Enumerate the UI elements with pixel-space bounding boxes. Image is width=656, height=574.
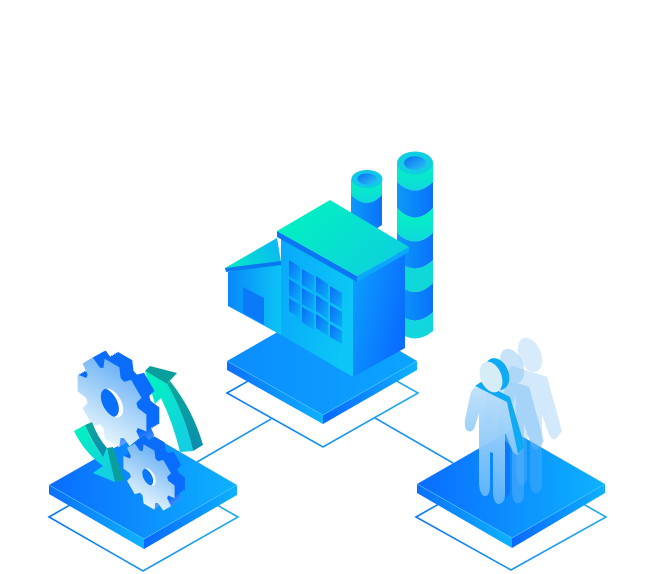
platform slab xyxy=(227,306,417,424)
platform slab xyxy=(49,431,237,549)
platform slab xyxy=(417,430,605,548)
connector line: gears to factory xyxy=(197,419,271,462)
platform outline xyxy=(227,339,418,447)
infographic: factory connected to gears and people xyxy=(48,152,608,572)
icon: small gear xyxy=(123,436,185,511)
chimney: small xyxy=(351,170,382,235)
panel: people platform xyxy=(416,430,606,570)
panel: factory xyxy=(225,152,433,377)
icon: curved arrow up xyxy=(145,366,203,452)
chimney: large xyxy=(397,152,433,338)
panel: gears platform xyxy=(49,329,238,571)
panel: people xyxy=(465,334,562,504)
main building side wall xyxy=(353,250,405,377)
platform outline xyxy=(49,463,238,571)
icon: curved arrow down xyxy=(74,422,124,482)
person: middle xyxy=(484,345,544,503)
panel: factory platform xyxy=(227,306,418,447)
connector line: factory to people xyxy=(375,418,453,463)
main building front wall xyxy=(281,236,353,377)
icon: large gear xyxy=(78,350,160,448)
platform outline xyxy=(416,463,606,570)
windows xyxy=(289,260,342,344)
person: back xyxy=(502,334,562,493)
main roof xyxy=(277,200,409,282)
annex building xyxy=(225,238,281,335)
person: front xyxy=(465,354,525,504)
